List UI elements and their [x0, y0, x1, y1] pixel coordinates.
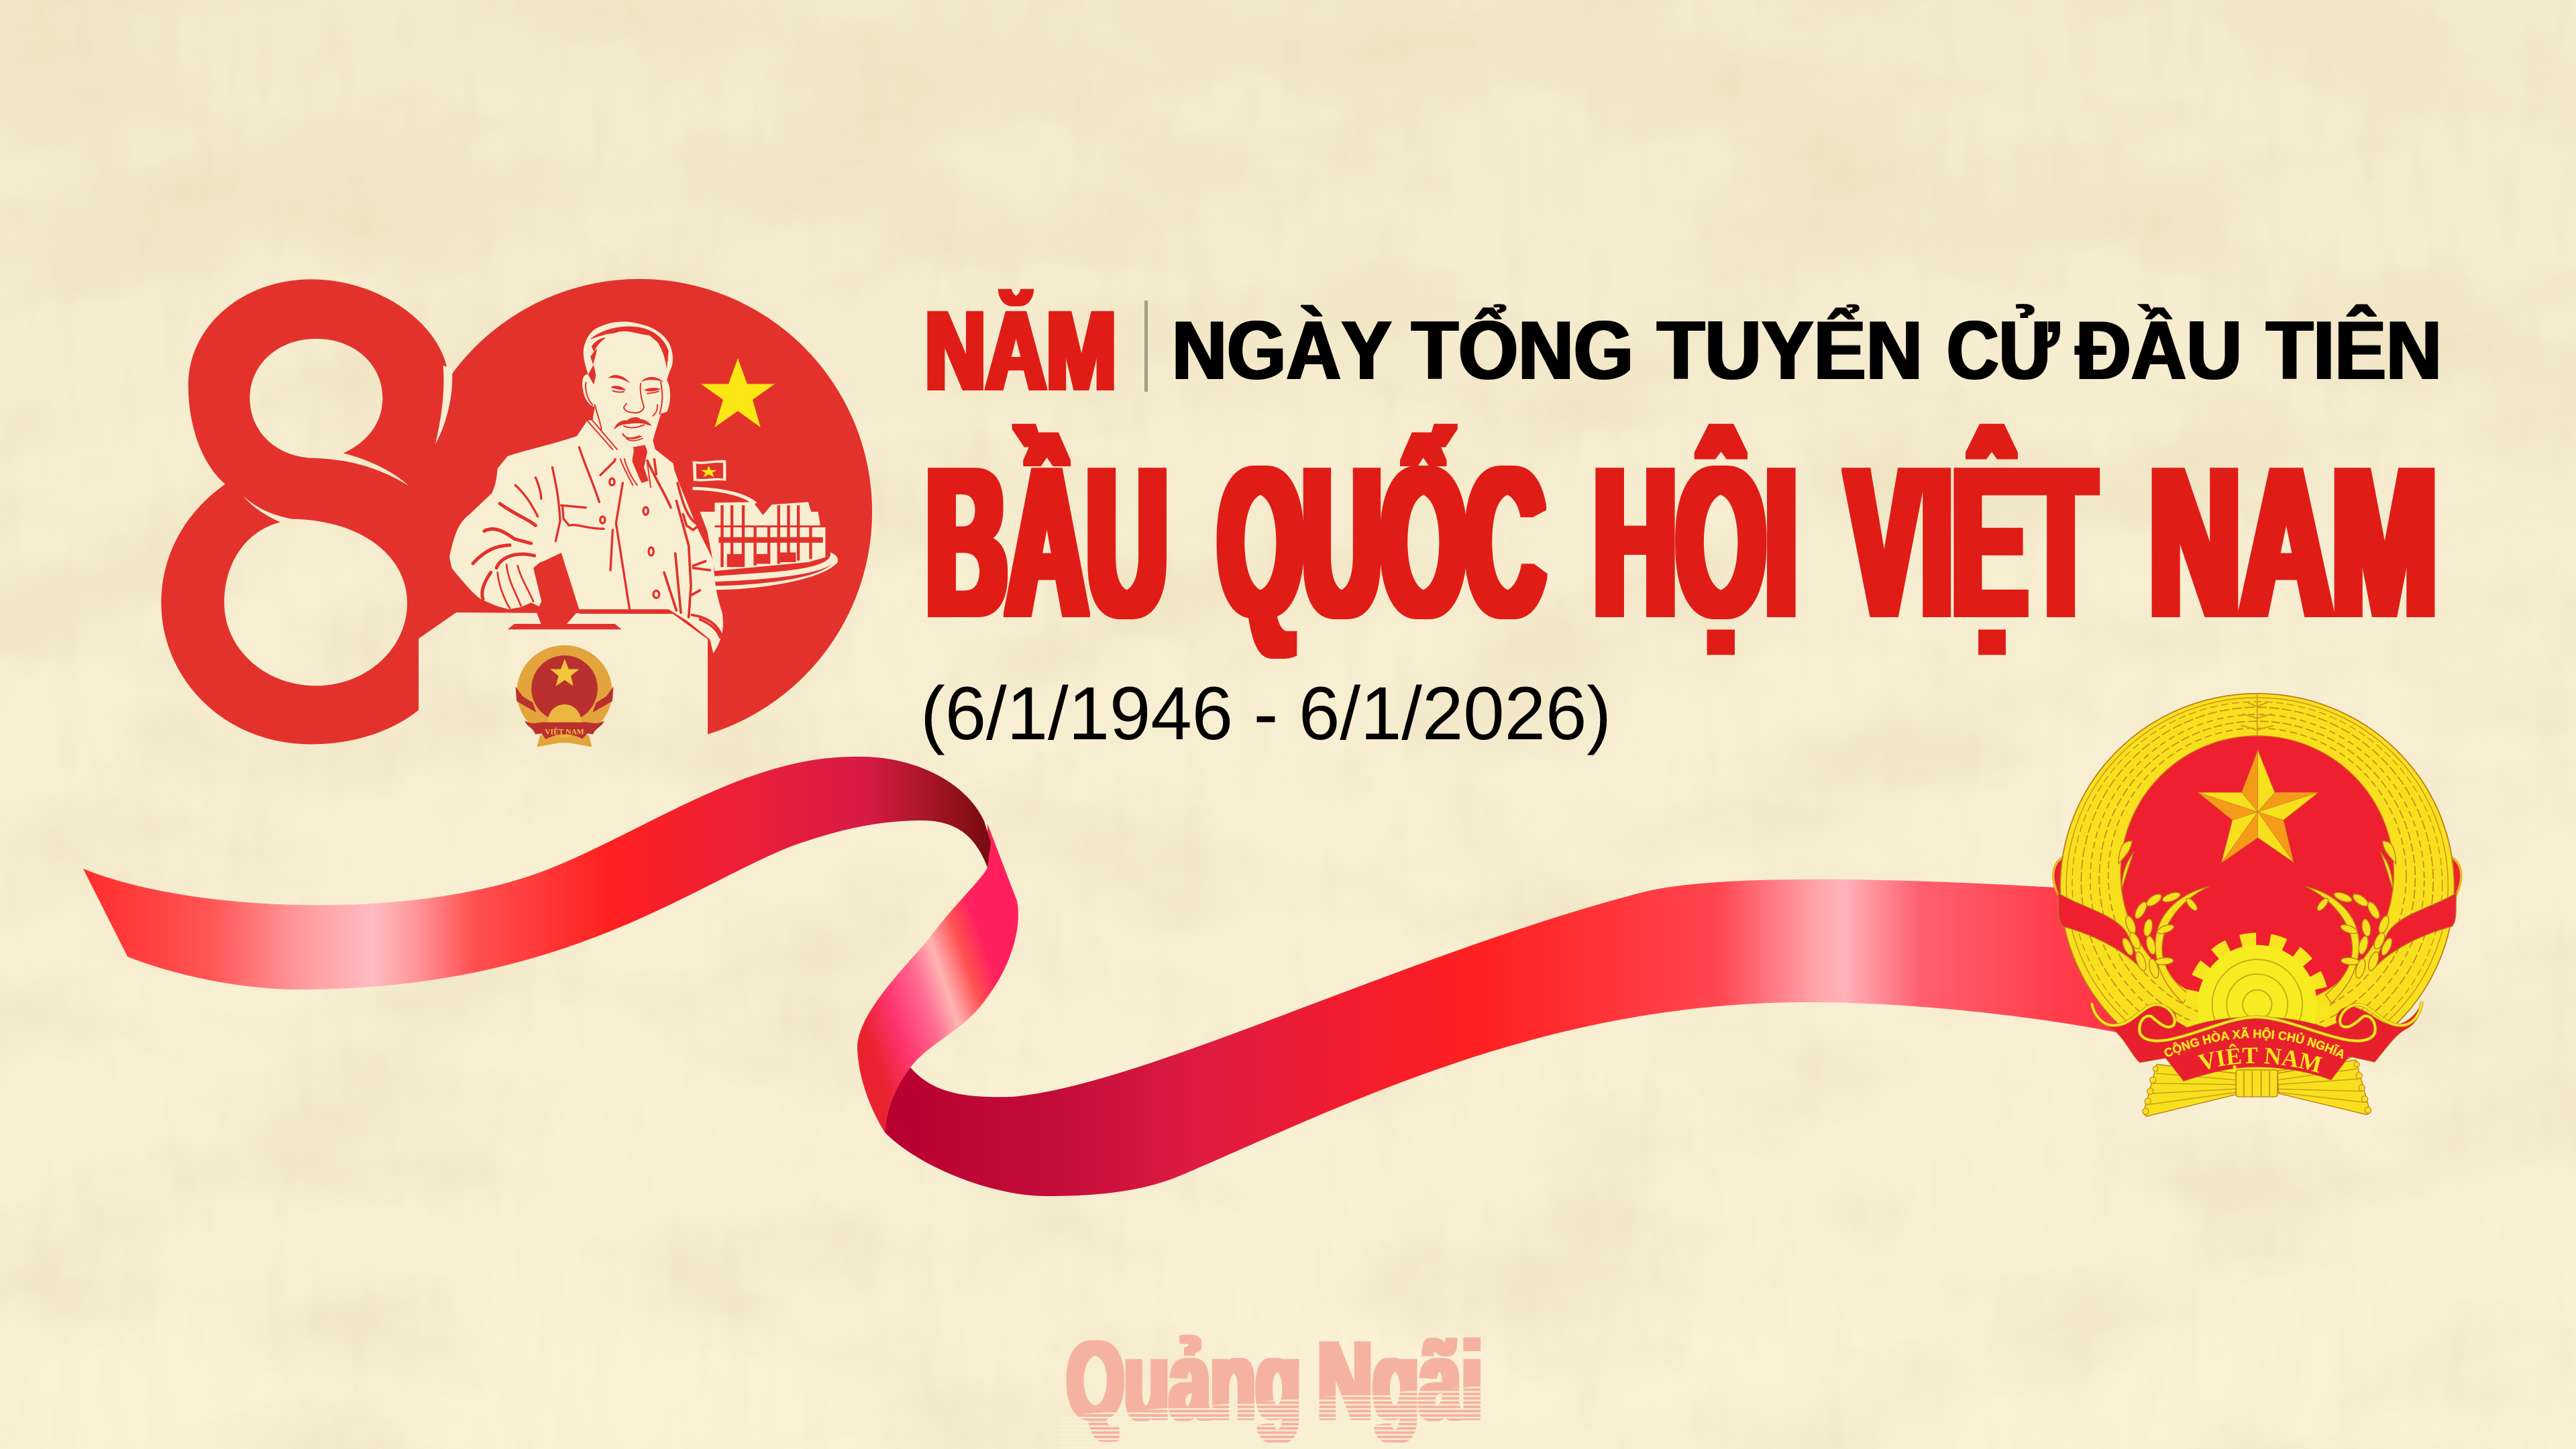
red numerals, star and building cut by the ballot box: [161, 279, 872, 745]
figure: head: [582, 321, 673, 458]
watermark: Quảng Ngãi: Quảng: [1067, 1319, 1301, 1442]
national emblem: [2052, 693, 2462, 1117]
subtitle: CỬ: [1947, 304, 2059, 397]
subtitle: TIÊN: [2266, 304, 2442, 397]
small emblem on ballot box: VIỆT NAM: [545, 727, 584, 737]
logo: number 80 with President Ho Chi Minh voting: [161, 279, 872, 745]
subtitle: TUYỂN: [1657, 304, 1923, 397]
emblem: banner text: CỘNG HÒA XÃ HỘI CHỦ NGHĨA: [2164, 1026, 2344, 1059]
emblem: wreath, disc, star, stalks and cog: [2053, 694, 2461, 1081]
ribbon: upper left section: [83, 757, 991, 989]
word NĂM: NĂM: [925, 287, 1116, 414]
main heading: BẦU: [926, 424, 1167, 660]
ribbon: lower long section: [885, 879, 2147, 1196]
figure: goatee: [623, 435, 649, 483]
heading line 1: [925, 287, 2442, 414]
watermark: Quảng Ngãi: Ngãi: [1318, 1319, 1483, 1442]
main heading: QUỐC: [1218, 424, 1544, 660]
subtitle: ĐẦU: [2076, 304, 2242, 397]
ballot paper and slot: [508, 553, 669, 629]
subtitle: NGÀY: [1172, 305, 1392, 397]
subtitle: [1172, 304, 2442, 397]
main heading: HỘI: [1594, 424, 1797, 660]
ribbon: twisted section: [857, 824, 1018, 1132]
emblem: sheaf base and scroll banner: [2090, 1001, 2423, 1117]
main heading: VIỆT: [1847, 424, 2095, 660]
figure: coat and hand: [449, 419, 723, 653]
dates: (6/1/1946 - 6/1/2026): [920, 672, 1611, 755]
divider: [1144, 301, 1148, 392]
ribbon: [83, 757, 2147, 1196]
emblem: sheaf base and scroll banner: VIỆT NAM: [2198, 1044, 2322, 1073]
small emblem on ballot box: [515, 645, 613, 747]
subtitle: TỔNG: [1411, 304, 1633, 397]
main heading: [926, 424, 2437, 660]
